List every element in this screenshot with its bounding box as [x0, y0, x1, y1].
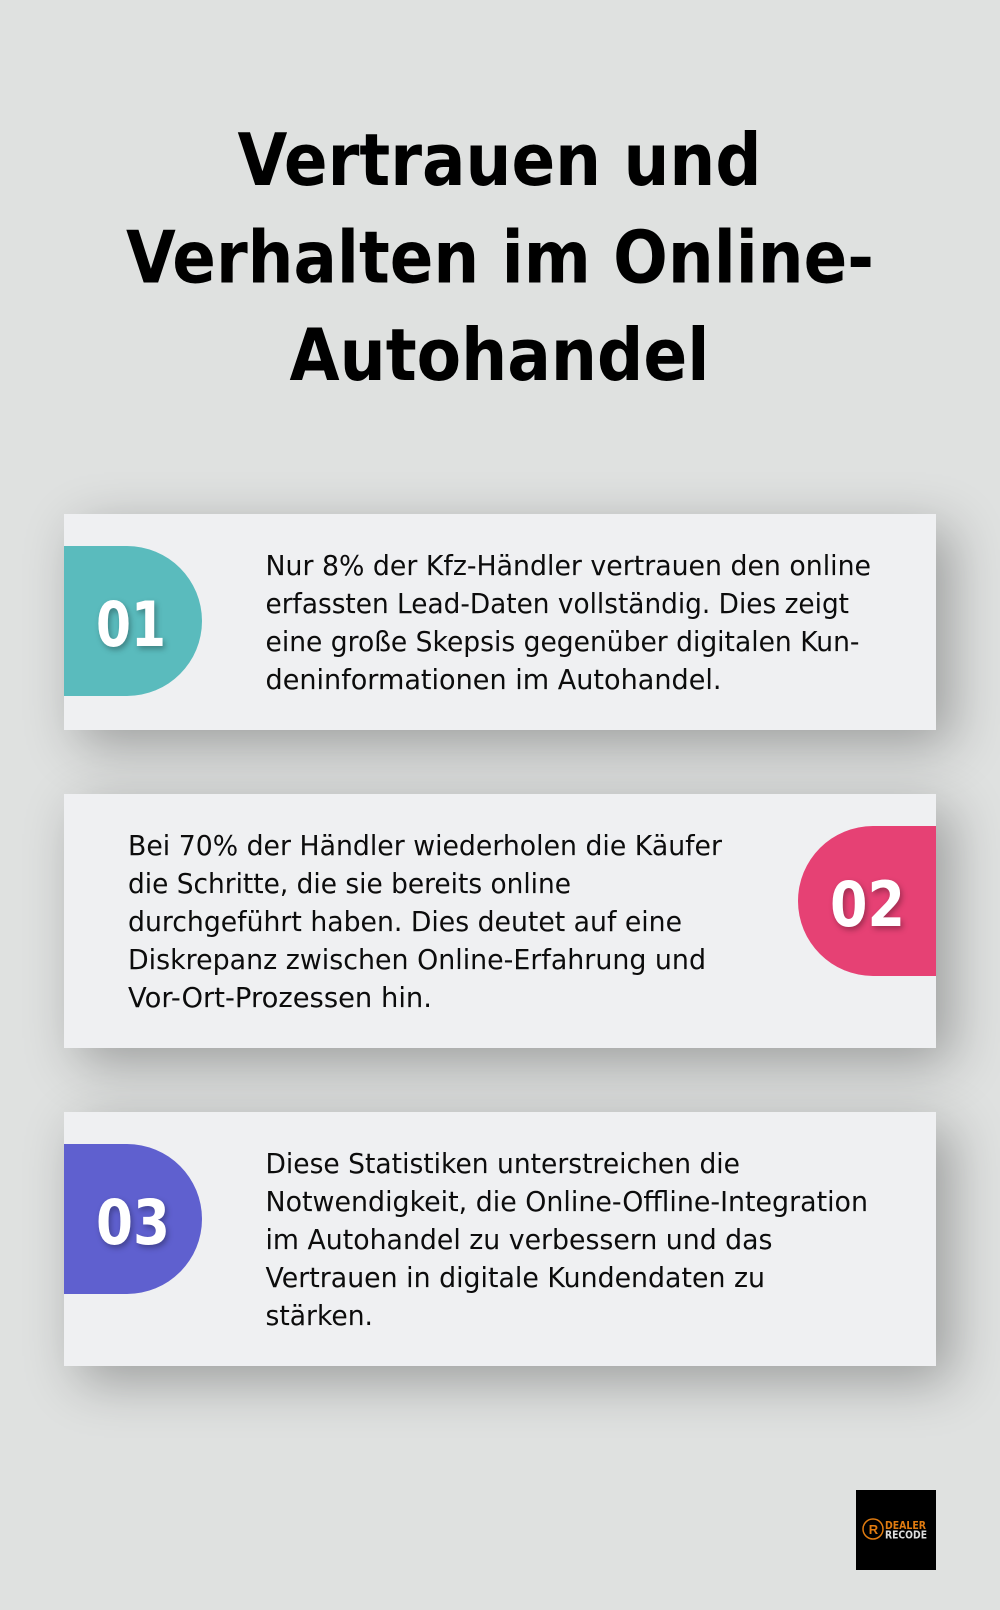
title: Autohandel [290, 314, 710, 398]
text block: card 03 [266, 1148, 868, 1332]
badge: 03 [64, 1144, 202, 1294]
text block: card 02 [128, 830, 723, 1014]
text block: card 03: stärken. [266, 1300, 373, 1332]
text block: card 03: Diese Statistiken unterstreichen die [266, 1148, 740, 1180]
text block: card 01: eine große Skepsis gegenüber digitalen Kun- [266, 626, 860, 658]
badge: 01 [64, 546, 202, 696]
badge: 02: 02 [830, 868, 905, 941]
logo: Dealer Recode: RECODE [885, 1530, 927, 1542]
text block: card 01: Nur 8% der Kfz-Händler vertrauen den online [266, 550, 871, 582]
logo: Dealer Recode: R [869, 1522, 879, 1537]
panel: card 02 [64, 794, 936, 1048]
title [126, 119, 874, 398]
text block: card 02: Diskrepanz zwischen Online-Erfahrung und [128, 944, 706, 976]
text block: card 02: durchgeführt haben. Dies deutet auf eine [128, 906, 682, 938]
title: Vertrauen und [238, 119, 762, 203]
text block: card 01: erfassten Lead-Daten vollständig. Dies zeigt [266, 588, 849, 620]
badge: 02 [798, 826, 936, 976]
panel: card 03 [64, 1112, 936, 1366]
text block: card 03: Vertrauen in digitale Kundendaten zu [266, 1262, 765, 1294]
title: Verhalten im Online- [126, 216, 874, 300]
logo: Dealer Recode [856, 1490, 936, 1570]
text block: card 02: Bei 70% der Händler wiederholen die Käufer [128, 830, 723, 862]
badge: 03: 03 [96, 1186, 170, 1259]
text block: card 02: die Schritte, die sie bereits online [128, 868, 571, 900]
badge: 01: 01 [96, 588, 166, 661]
text block: card 01 [266, 550, 871, 696]
text block: card 02: Vor-Ort-Prozessen hin. [128, 982, 432, 1014]
text block: card 03: im Autohandel zu verbessern und das [266, 1224, 772, 1256]
panel: card 01 [64, 514, 936, 730]
text block: card 03: Notwendigkeit, die Online-Offline-Integration [266, 1186, 868, 1218]
text block: card 01: deninformationen im Autohandel. [266, 664, 722, 696]
logo: Dealer Recode: DEALER [885, 1520, 926, 1532]
